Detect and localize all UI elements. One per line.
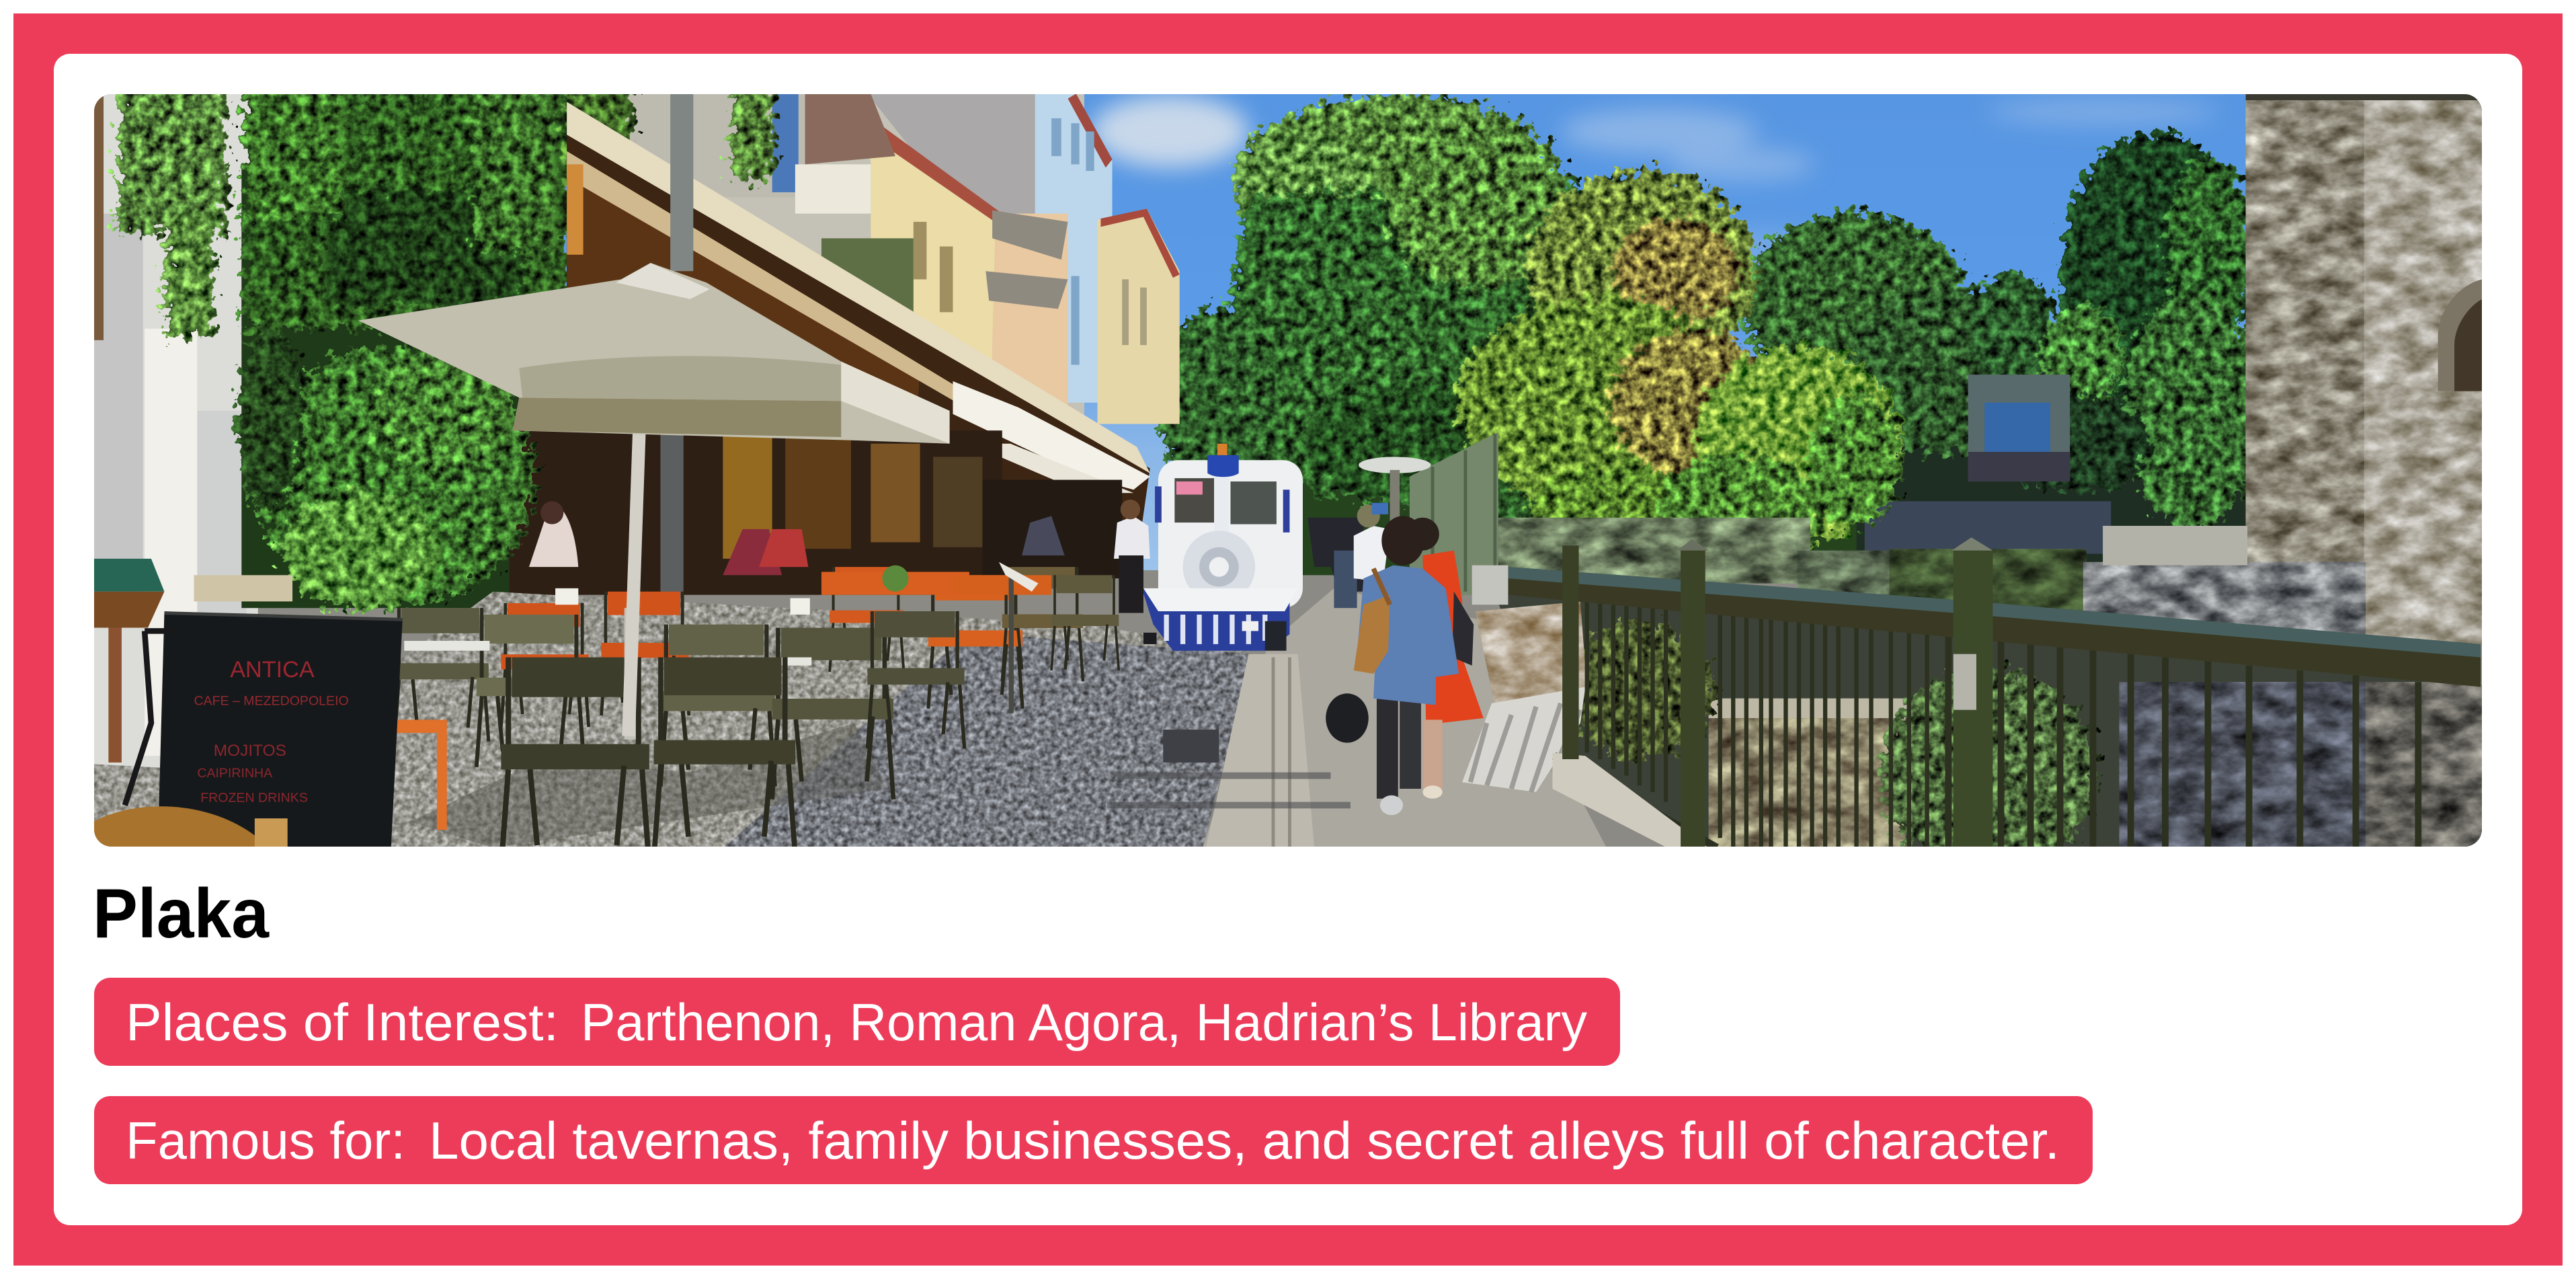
- cobbled cafe terrace and street: [93, 588, 1607, 848]
- dark backdrop behind ivy and shrub: [241, 164, 563, 608]
- chalkboard menu sign: MOJITOS: [214, 742, 286, 760]
- wooden chair at bottom left: [93, 806, 288, 848]
- upper buildings: [567, 93, 1180, 510]
- pill: famous for: Local tavernas, family businesses, and secret alleys full of character.: [429, 1111, 2060, 1170]
- chalkboard menu sign: [158, 613, 403, 848]
- woman in red: [1406, 518, 1484, 799]
- pill: places of interest: Places of Interest:: [126, 993, 559, 1052]
- market umbrella: [358, 263, 950, 736]
- hedge and rock wall: [1798, 526, 2366, 637]
- big green tree: [1156, 93, 1626, 542]
- kiosk stand and black chair at left: [93, 559, 292, 805]
- tourist train: [1142, 444, 1303, 651]
- green metal fence panel and patio heater: [1359, 432, 1498, 595]
- sloped awning and shaded cafe front: [567, 93, 1150, 526]
- green railing: [1472, 537, 2481, 848]
- chalkboard menu sign: CAIPIRINHA: [197, 766, 272, 781]
- large shrub: [238, 327, 536, 610]
- heading: Plaka: Plaka: [93, 875, 270, 953]
- woman in blue shirt with bags: [1326, 516, 1459, 815]
- pill: famous for: Famous for:: [126, 1111, 405, 1170]
- chalkboard menu sign: FROZEN DRINKS: [200, 791, 308, 806]
- chalkboard menu sign: ANTICA: [230, 657, 315, 683]
- distant trees behind the railing: [1265, 131, 2267, 575]
- autumn-tinted tree: [1457, 169, 1904, 570]
- pill: places of interest: Parthenon, Roman Agora, Hadrian’s Library: [581, 993, 1587, 1052]
- cafe interior: [510, 430, 1122, 598]
- sky: [93, 93, 2483, 570]
- pill: famous for: [94, 1096, 2093, 1184]
- ivy covered wall: [118, 82, 774, 337]
- person in white with hat: [1354, 503, 1390, 582]
- base tone under the whole scene: [93, 559, 2483, 848]
- shrine building among trees: [1968, 375, 2070, 481]
- flowering shrubs beyond the fence: [1498, 518, 1810, 584]
- chalkboard menu sign: CAFE – MEZEDOPOLEIO: [194, 693, 349, 708]
- stack of folded white barriers: [1462, 601, 1587, 792]
- stone tower: [2246, 93, 2483, 652]
- left building with white wall: [93, 93, 258, 784]
- pill: places of interest: [94, 978, 1620, 1066]
- photo: Plaka street with cafe tables, tourist train, pedestrians, trees and stone tower: [94, 94, 2482, 847]
- ground below the bridge seen through railing: [1487, 575, 2483, 878]
- orange and olive cafe chairs: [395, 562, 1119, 867]
- pedestrians near train: [1114, 500, 1363, 613]
